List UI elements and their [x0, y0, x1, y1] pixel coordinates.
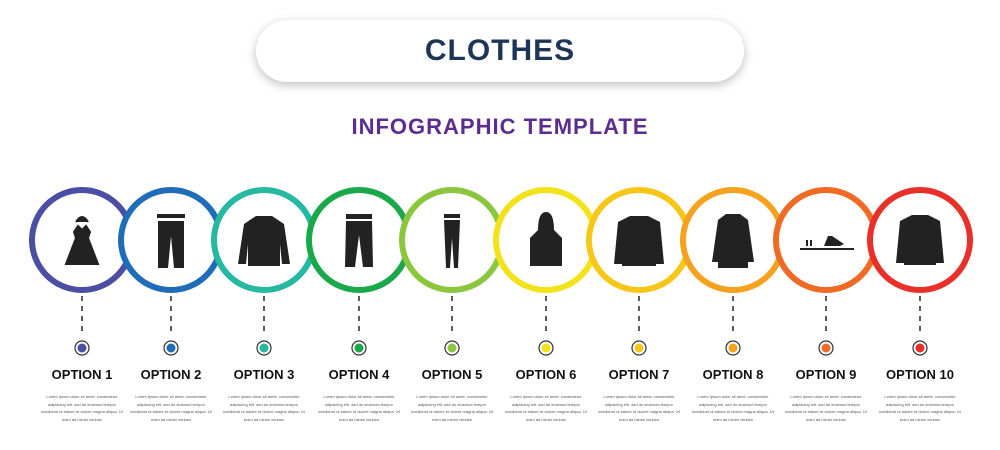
- icon: leggings: [444, 214, 460, 268]
- icon: jeans: [345, 214, 373, 267]
- option 6 circle: [496, 190, 596, 355]
- text 6: Lorem ipsum dolor sit amet, consectetur adipiscing elit, sed do eiusmod tempor incididunt ut labore et dolore magna aliqua. Ut enim ad minim veniam: [505, 394, 587, 422]
- icon: sport jacket: [896, 215, 944, 265]
- option 9 label: OPTION 9: [796, 367, 856, 382]
- option 10 circle: [870, 190, 970, 355]
- option 8 label: OPTION 8: [703, 367, 763, 382]
- text 7: Lorem ipsum dolor sit amet, consectetur adipiscing elit, sed do eiusmod tempor incididunt ut labore et dolore magna aliqua. Ut enim ad minim veniam: [598, 394, 680, 422]
- icon: dress: [66, 217, 98, 264]
- option 7 label: OPTION 7: [609, 367, 669, 382]
- icon: biker jacket: [238, 216, 290, 266]
- text 2: Lorem ipsum dolor sit amet, consectetur adipiscing elit, sed do eiusmod tempor incididunt ut labore et dolore magna aliqua. Ut enim ad minim veniam: [130, 394, 212, 422]
- title: CLOTHES: [425, 34, 575, 67]
- text 5: Lorem ipsum dolor sit amet, consectetur adipiscing elit, sed do eiusmod tempor incididunt ut labore et dolore magna aliqua. Ut enim ad minim veniam: [411, 394, 493, 422]
- option 1 circle: [32, 190, 132, 355]
- option 6 label: OPTION 6: [516, 367, 576, 382]
- icon: shirt jacket: [614, 216, 664, 266]
- option 4 label: OPTION 4: [329, 367, 389, 382]
- descriptions: [41, 394, 961, 422]
- option 1 label: OPTION 1: [52, 367, 112, 382]
- option 4 circle: [309, 190, 409, 355]
- icon: hoodie: [530, 212, 562, 266]
- option 5 circle: [402, 190, 502, 355]
- option 9 circle: [776, 190, 876, 355]
- option 8 circle: [683, 190, 783, 355]
- text 8: Lorem ipsum dolor sit amet, consectetur adipiscing elit, sed do eiusmod tempor incididunt ut labore et dolore magna aliqua. Ut enim ad minim veniam: [692, 394, 774, 422]
- icon: coat: [712, 214, 754, 268]
- text 1: Lorem ipsum dolor sit amet, consectetur adipiscing elit, sed do eiusmod tempor incididunt ut labore et dolore magna aliqua. Ut enim ad minim veniam: [41, 394, 123, 422]
- option 10 label: OPTION 10: [886, 367, 954, 382]
- option 2 circle: [121, 190, 221, 355]
- text 10: Lorem ipsum dolor sit amet, consectetur adipiscing elit, sed do eiusmod tempor incididunt ut labore et dolore magna aliqua. Ut enim ad minim veniam: [879, 394, 961, 422]
- text 3: Lorem ipsum dolor sit amet, consectetur adipiscing elit, sed do eiusmod tempor incididunt ut labore et dolore magna aliqua. Ut enim ad minim veniam: [223, 394, 305, 422]
- option 3 circle: [214, 190, 314, 355]
- option 5 label: OPTION 5: [422, 367, 482, 382]
- option 7 circle: [589, 190, 689, 355]
- icon: sandal: [800, 236, 854, 250]
- option 2 label: OPTION 2: [141, 367, 201, 382]
- option 3 label: OPTION 3: [234, 367, 294, 382]
- text 4: Lorem ipsum dolor sit amet, consectetur adipiscing elit, sed do eiusmod tempor incididunt ut labore et dolore magna aliqua. Ut enim ad minim veniam: [318, 394, 400, 422]
- title: [256, 20, 744, 82]
- text 9: Lorem ipsum dolor sit amet, consectetur adipiscing elit, sed do eiusmod tempor incididunt ut labore et dolore magna aliqua. Ut enim ad minim veniam: [785, 394, 867, 422]
- icon: trousers: [157, 214, 185, 268]
- subtitle: INFOGRAPHIC TEMPLATE: [351, 114, 649, 139]
- labels: [52, 367, 954, 382]
